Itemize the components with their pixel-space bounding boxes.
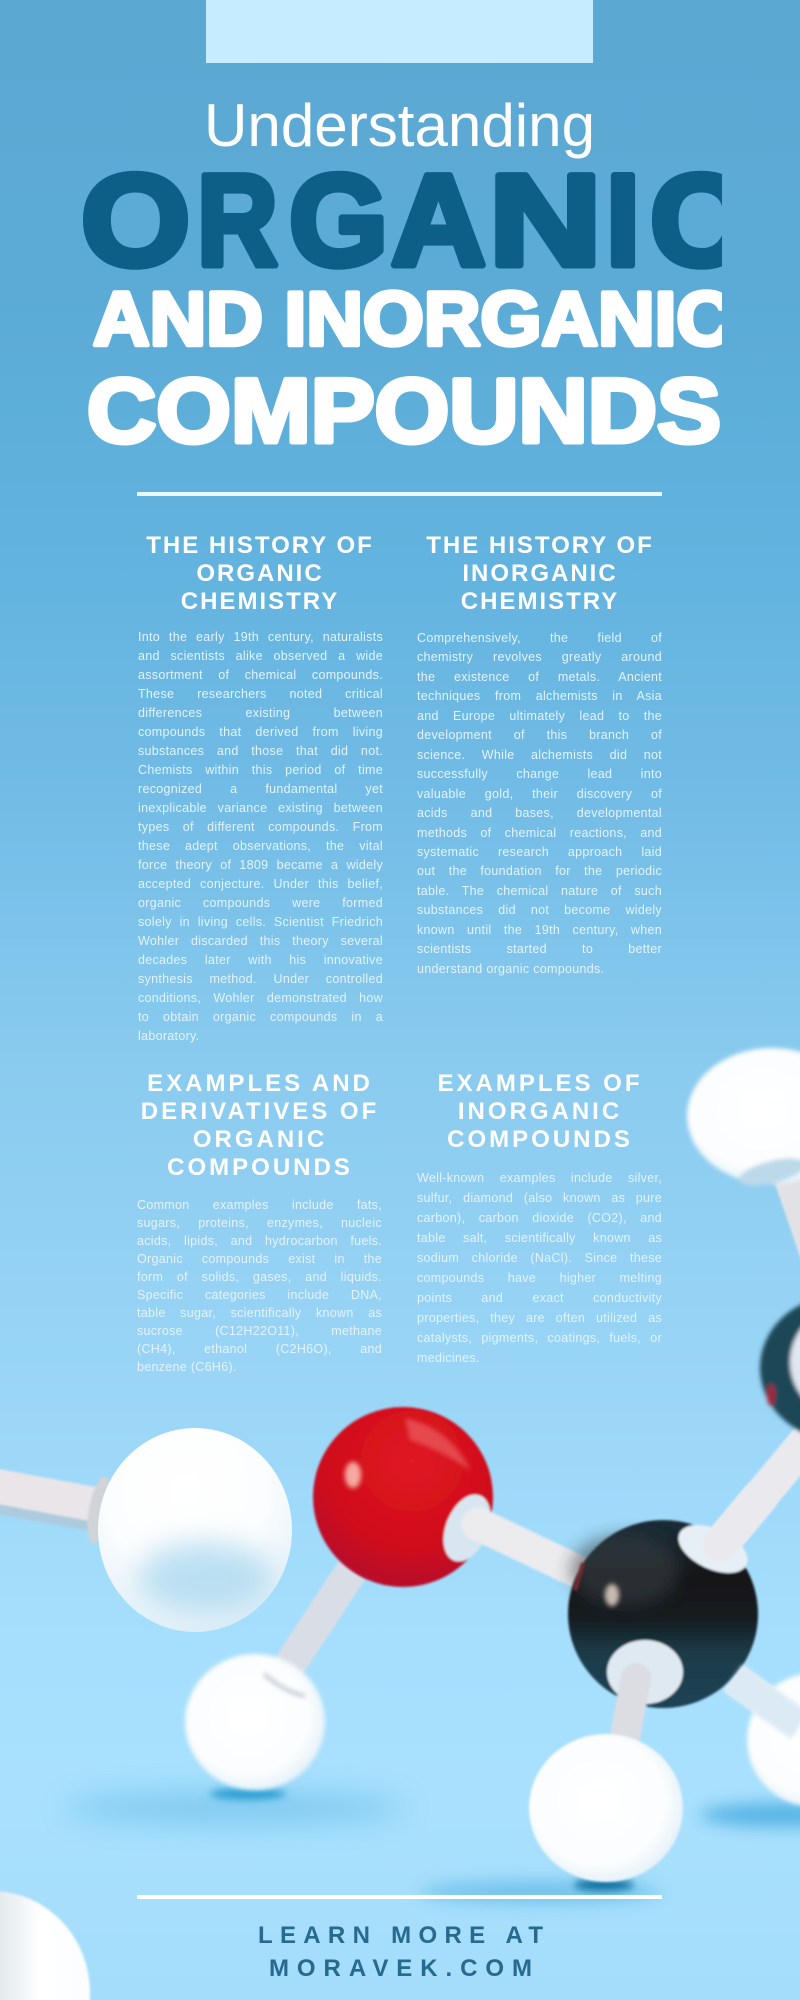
text: history of inorganic: scientists started to better [417, 942, 662, 956]
footer line: website: MORAVEK.COM [269, 1955, 532, 1982]
text: history of organic: inexplicable variance existing between [138, 801, 383, 815]
text: history of organic: Into the early 19th century, naturalists [138, 630, 383, 644]
sticks behind atoms [0, 1178, 800, 1722]
text: history of inorganic: understand organic compounds. [417, 962, 604, 976]
title line: COMPOUNDS: COMPOUNDS [87, 361, 721, 462]
heading: history of inorganic: CHEMISTRY [461, 588, 619, 615]
text: history of organic: solely in living cells. Scientist Friedrich [138, 915, 383, 929]
text: history of organic: These researchers noted critical [138, 687, 383, 701]
title line: ORGANIC: O [81, 148, 190, 293]
text: history of organic: synthesis method. Under controlled [138, 972, 383, 986]
text: examples of organic: sucrose (C12H22O11), methane [137, 1324, 382, 1338]
heading: examples of organic: DERIVATIVES OF [141, 1098, 379, 1125]
heading: history of inorganic: THE HISTORY OF [426, 532, 654, 559]
heading: history of organic [146, 532, 374, 615]
title line: Understanding: Understanding [204, 92, 595, 159]
title line: ORGANIC: I [606, 148, 640, 293]
heading: history of organic: THE HISTORY OF [146, 532, 374, 559]
text: history of organic: recognized a fundamental yet [138, 782, 383, 796]
text: history of inorganic: valuable gold, their discovery of [417, 787, 662, 801]
heading: examples of organic: ORGANIC [193, 1126, 327, 1153]
text: history of inorganic [417, 631, 662, 976]
text: history of inorganic: chemistry revolves greatly around [417, 650, 662, 664]
title line: AND INORGANIC: AND INORGANIC [93, 277, 733, 362]
atom: white bottom center [529, 1734, 683, 1882]
heading: examples of inorganic [437, 1070, 643, 1153]
atom: black upper right [760, 1296, 800, 1440]
text: history of inorganic: Comprehensively, the field of [417, 631, 662, 645]
text: examples of organic: acids, lipids, and hydrocarbon fuels. [137, 1234, 382, 1248]
text: examples of organic [137, 1198, 382, 1374]
title [83, 92, 722, 446]
heading: history of inorganic: INORGANIC [462, 560, 618, 587]
text: examples of organic: benzene (C6H6). [137, 1360, 237, 1374]
text: history of inorganic: table. The chemical nature of such [417, 884, 662, 898]
atom: large white [83, 1428, 292, 1632]
title line: ORGANIC: R [197, 147, 278, 293]
text: examples of organic: (CH4), ethanol (C2H6O), and [137, 1342, 382, 1356]
text: history of inorganic: and Europe ultimately lead to the [417, 709, 662, 723]
text: history of inorganic: methods of chemical reactions, and [417, 826, 662, 840]
top light blue tab [206, 0, 593, 63]
text: examples of inorganic: carbon), carbon dioxide (CO2), and [417, 1211, 662, 1225]
photo: molecular model [0, 1045, 800, 2000]
heading: examples of inorganic: EXAMPLES OF [437, 1070, 643, 1097]
heading: examples of organic: COMPOUNDS [167, 1154, 353, 1181]
atom: red oxygen [313, 1407, 585, 1587]
text: examples of inorganic: compounds have higher melting [417, 1271, 662, 1285]
text: examples of inorganic: medicines. [417, 1351, 480, 1365]
text: history of organic [138, 630, 383, 1043]
text: examples of organic: Specific categories include DNA, [137, 1288, 382, 1302]
call to action [258, 1922, 543, 1982]
text: history of organic: substances and those that did not. [138, 744, 383, 758]
text: history of organic: force theory of 1809 became a widely [138, 858, 383, 872]
heading: examples of inorganic: INORGANIC [458, 1098, 622, 1125]
text: history of inorganic: acids and bases, developmental [417, 806, 662, 820]
text: history of organic: these adept observations, the vital [138, 839, 383, 853]
text: examples of inorganic: properties, they are often utilized as [417, 1311, 662, 1325]
text: examples of organic: Common examples include fats, [137, 1198, 382, 1212]
text: history of organic: assortment of chemical compounds. [138, 668, 383, 682]
text: examples of inorganic: Well-known examples include silver, [417, 1171, 662, 1185]
text: history of organic: organic compounds were formed [138, 896, 383, 910]
heading: examples of organic [141, 1070, 379, 1181]
text: history of organic: compounds that derived from living [138, 725, 383, 739]
text: examples of inorganic: sodium chloride (NaCl). Since these [417, 1251, 662, 1265]
title line: ORGANIC: A [391, 148, 486, 293]
title line: ORGANIC: C [650, 148, 747, 293]
text: examples of inorganic: points and exact conductivity [417, 1291, 662, 1305]
text: history of organic: types of different compounds. From [138, 820, 383, 834]
text: history of organic: and scientists alike observed a wide [138, 649, 383, 663]
text: examples of inorganic [417, 1171, 662, 1365]
atom: black carbon [568, 1497, 760, 1742]
text: history of organic: accepted conjecture. Under this belief, [138, 877, 383, 891]
text: history of organic: conditions, Wohler demonstrated how [138, 991, 383, 1005]
title line: ORGANIC [83, 170, 722, 270]
text: history of organic: Wohler discarded this theory several [138, 934, 383, 948]
text: history of organic: to obtain organic compounds in a [138, 1010, 383, 1024]
text: history of inorganic: out the foundation for the periodic [417, 864, 662, 878]
heading: examples of organic: EXAMPLES AND [147, 1070, 373, 1097]
title line: ORGANIC: G [289, 148, 388, 293]
atom: small white lower left [185, 1654, 325, 1790]
heading: examples of inorganic: COMPOUNDS [447, 1126, 633, 1153]
text: history of organic: Chemists within this period of time [138, 763, 383, 777]
text: history of inorganic: systematic research approach laid [417, 845, 662, 859]
text: examples of inorganic: catalysts, pigments, coatings, fuels, or [417, 1331, 662, 1345]
text: history of inorganic: successfully change lead into [417, 767, 662, 781]
text: history of inorganic: substances did not become widely [417, 903, 662, 917]
shadows on surface [65, 1788, 800, 1903]
text: examples of inorganic: sulfur, diamond (also known as pure [417, 1191, 662, 1205]
bottom divider [137, 1895, 662, 1899]
heading: history of inorganic [426, 532, 654, 615]
text: history of inorganic: science. While alchemists did not [417, 748, 662, 762]
text: history of inorganic: techniques from alchemists in Asia [417, 689, 662, 703]
title line: ORGANIC: N [489, 148, 602, 293]
text: examples of organic: Organic compounds exist in the [137, 1252, 382, 1266]
text: history of inorganic: the existence of metals. Ancient [417, 670, 662, 684]
atom: white upper right [687, 1048, 800, 1191]
heading: history of organic: ORGANIC [196, 560, 324, 587]
text: examples of organic: form of solids, gases, and liquids. [137, 1270, 382, 1284]
text: history of inorganic: development of this branch of [417, 728, 662, 742]
text: history of inorganic: known until the 19th century, when [417, 923, 662, 937]
top divider [137, 492, 662, 496]
heading: history of organic: CHEMISTRY [181, 588, 339, 615]
text: examples of inorganic: table salt, scientifically known as [417, 1231, 662, 1245]
text: history of organic: laboratory. [138, 1029, 199, 1043]
text: examples of organic: sugars, proteins, enzymes, nucleic [137, 1216, 382, 1230]
atom: white right edge [733, 1673, 800, 1807]
text: history of organic: decades later with his innovative [138, 953, 383, 967]
footer line: learn more: LEARN MORE AT [258, 1922, 543, 1949]
atom: white bottom left corner [0, 1891, 90, 2000]
text: examples of organic: table sugar, scientifically known as [137, 1306, 382, 1320]
text: history of organic: differences existing between [138, 706, 383, 720]
